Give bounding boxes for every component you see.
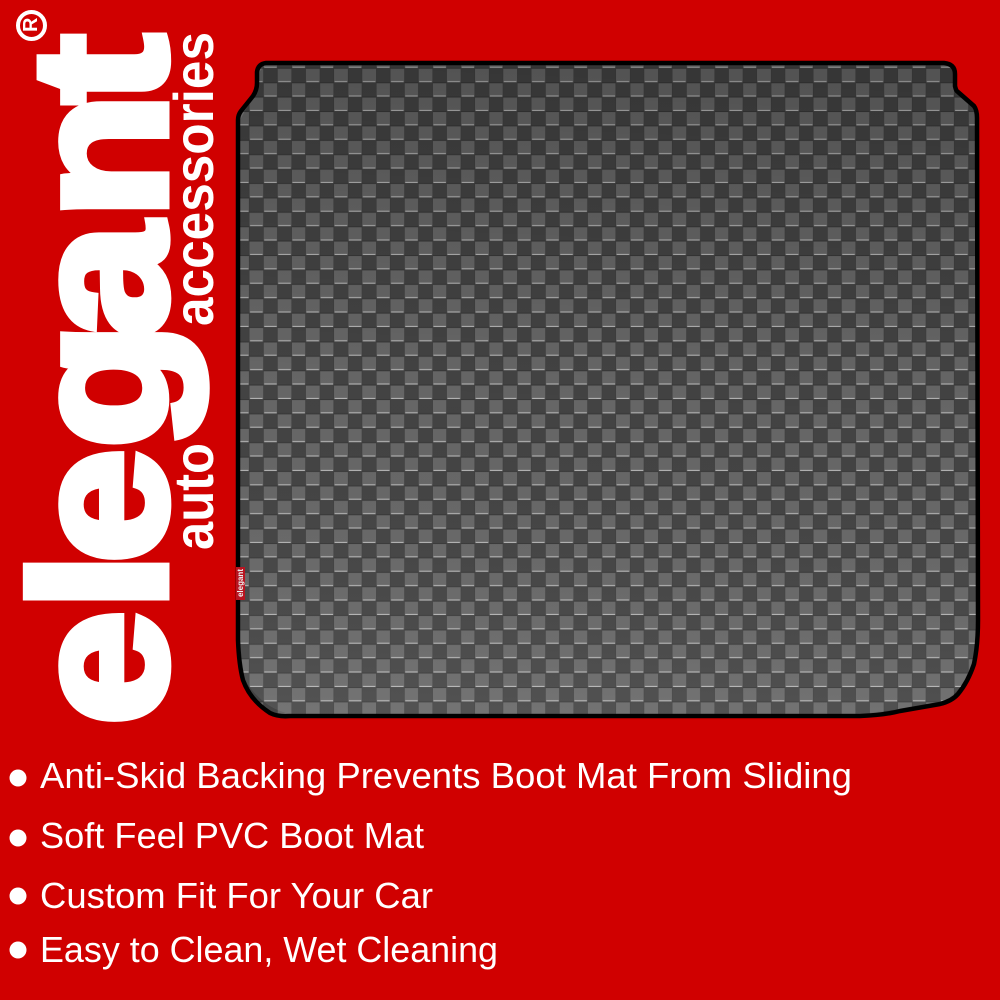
logo word: accessories: accessories <box>162 32 225 326</box>
feature list <box>10 755 852 970</box>
bullet 4: Easy to Clean, Wet Cleaning <box>40 929 498 970</box>
logo <box>0 12 225 725</box>
boot mat <box>236 63 978 716</box>
logo word: auto: auto <box>162 443 225 550</box>
registered mark <box>18 12 45 39</box>
mat surface with checker texture <box>238 63 978 716</box>
mat label tag: elegant <box>236 569 245 597</box>
bullet 2: Soft Feel PVC Boot Mat <box>40 815 424 856</box>
bullet 1: Anti-Skid Backing Prevents Boot Mat From Sliding <box>40 755 852 796</box>
mat shading <box>240 65 976 714</box>
registered mark: R <box>20 17 42 32</box>
bullet 3: Custom Fit For Your Car <box>40 875 433 916</box>
